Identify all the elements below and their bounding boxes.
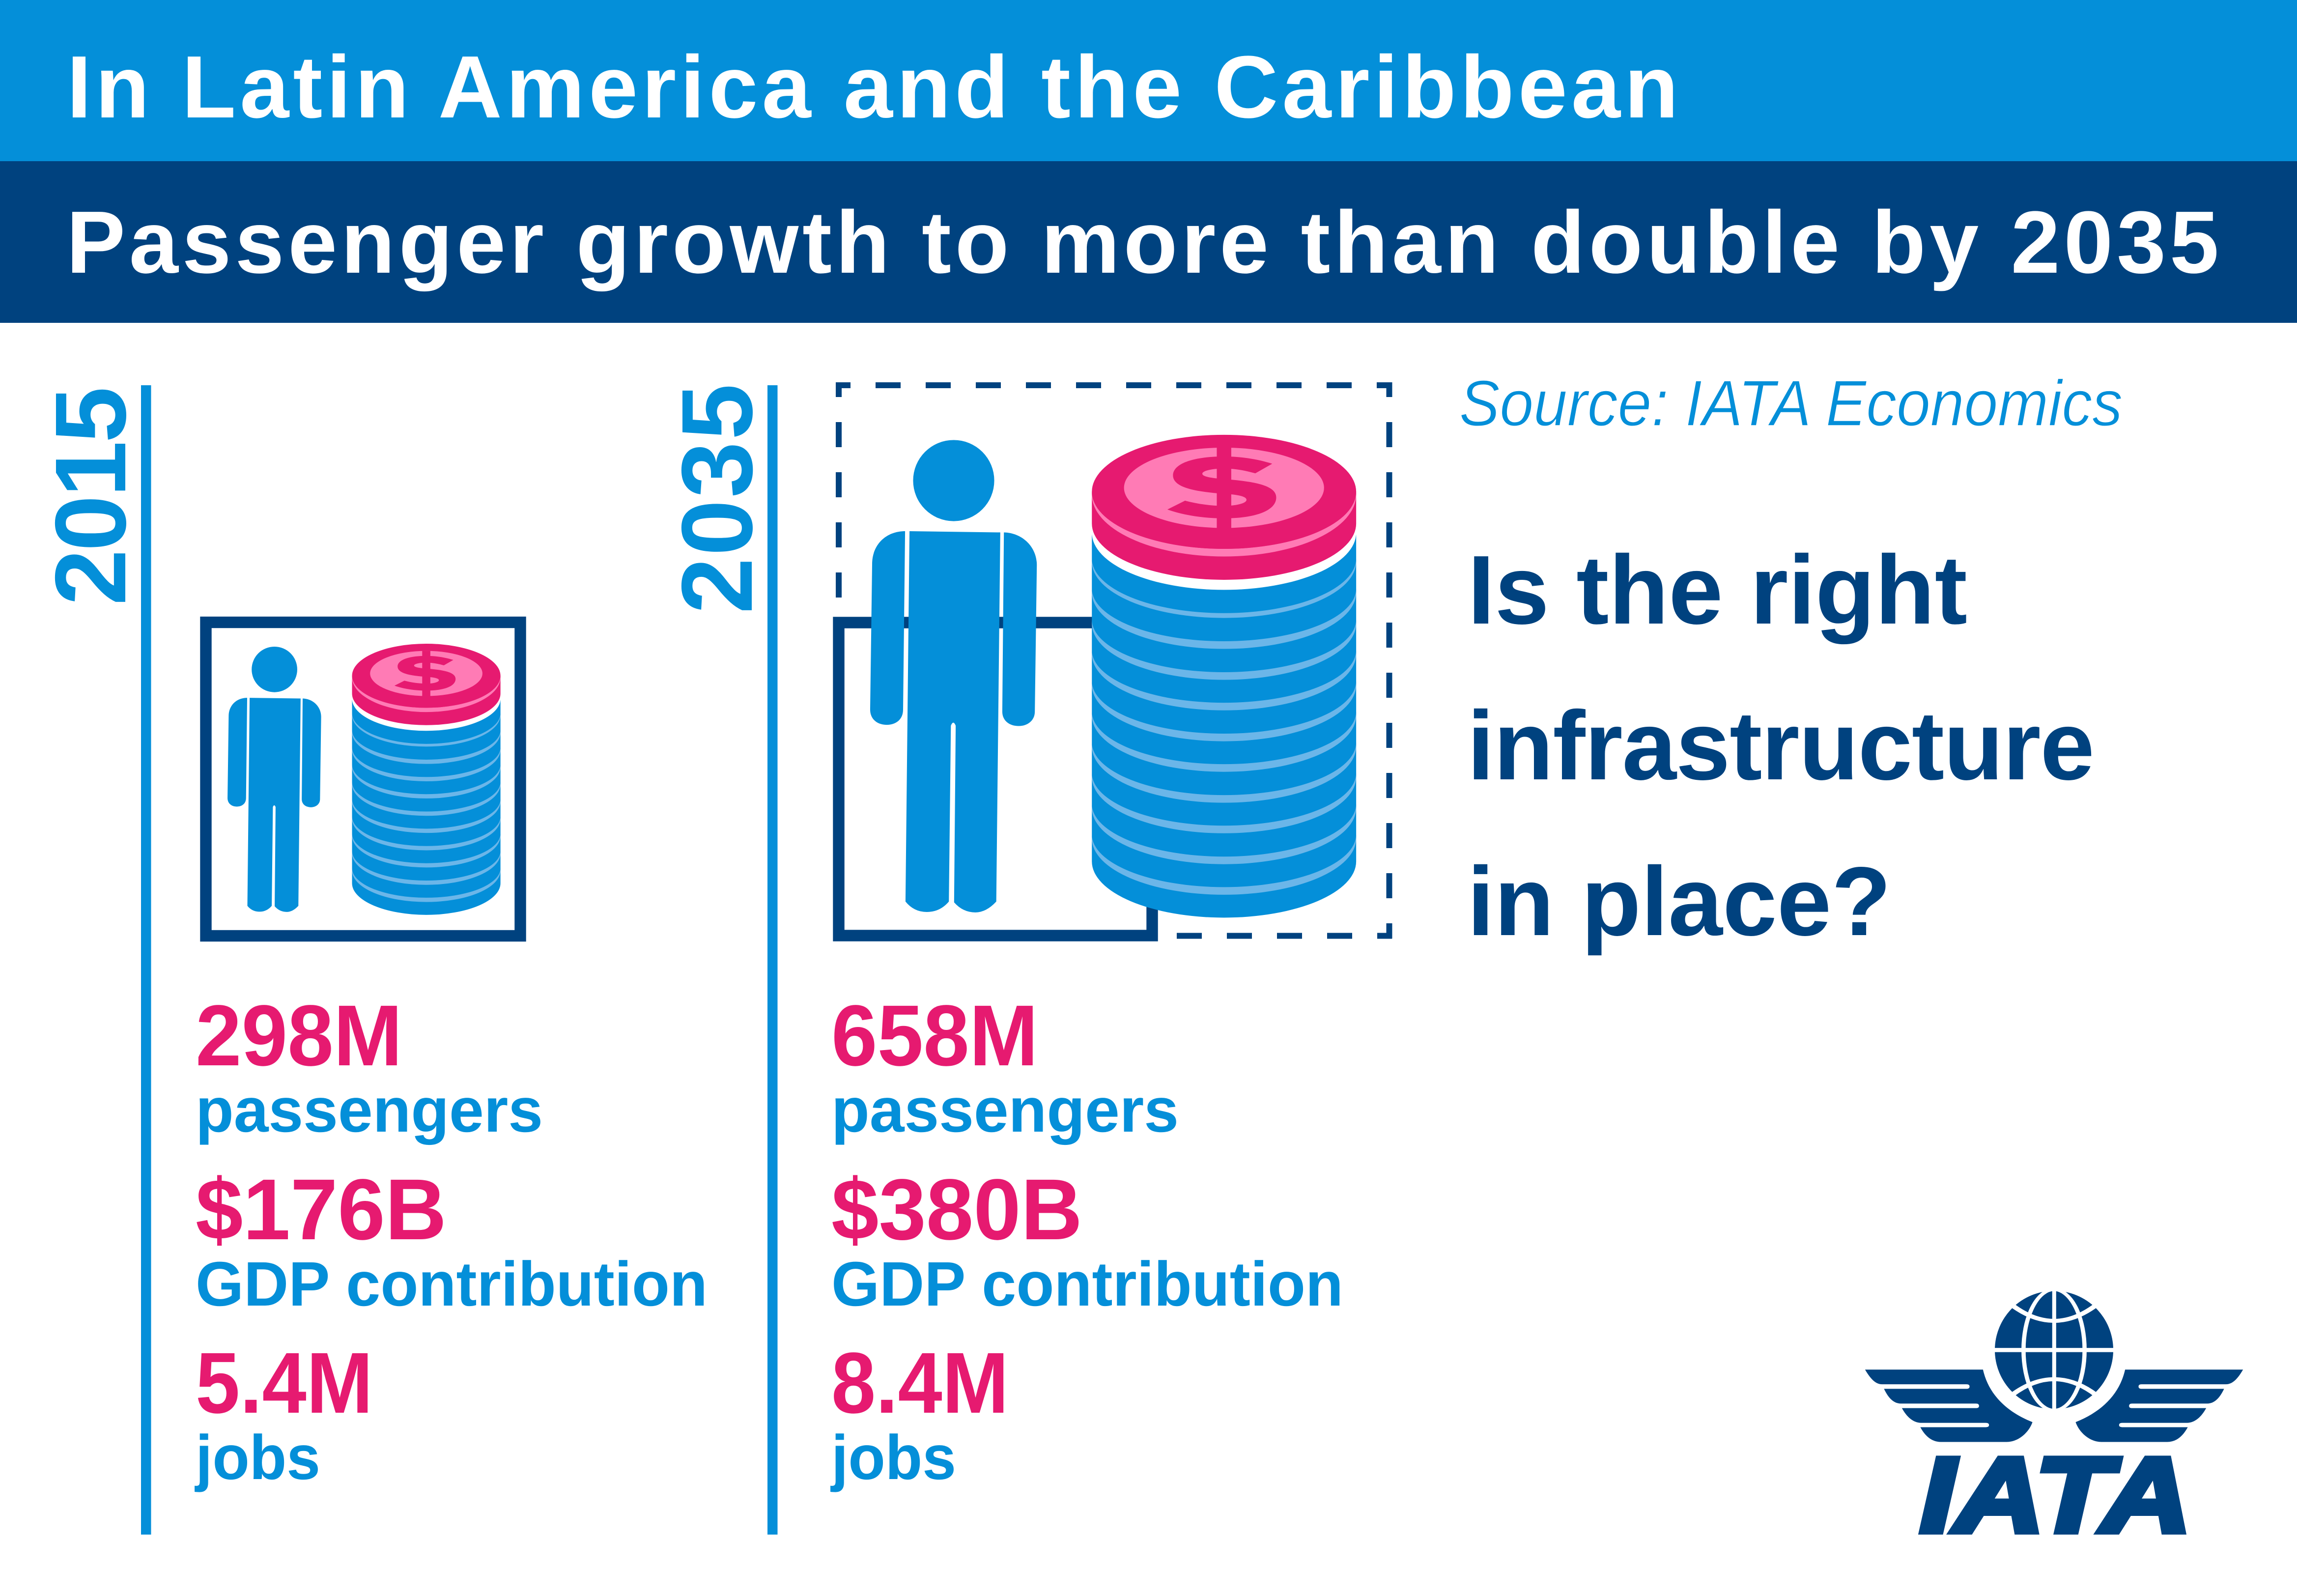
stat: 8.4M jobs [830, 1335, 1009, 1493]
stat: $176B GDP contribution: $176B [196, 1162, 447, 1258]
question text: infrastructure [1467, 691, 2095, 800]
stat: 298M passengers: passengers [196, 1075, 543, 1145]
logo: IATA [1865, 1289, 2243, 1554]
panel: 2035 [661, 382, 1392, 1535]
stat: 298M passengers [196, 988, 543, 1145]
stat: 298M passengers: 298M [196, 988, 402, 1084]
stat: 5.4M jobs: 5.4M [196, 1335, 373, 1431]
year label 2035: 2035 [661, 384, 773, 614]
stat: 658M passengers: 658M [831, 988, 1038, 1084]
question text [1467, 536, 2095, 956]
stat: 8.4M jobs: jobs [830, 1423, 956, 1493]
stat: $380B GDP contribution: GDP contribution [831, 1249, 1343, 1319]
heading: In Latin America and the Caribbean: In Latin America and the Caribbean [67, 38, 1678, 137]
icon: coin stack 2035 [1092, 435, 1356, 917]
icon: 2015 box with person and coin stack [206, 622, 520, 936]
source note: Source: IATA Economics [1459, 367, 2123, 439]
stat: $380B GDP contribution [831, 1162, 1343, 1319]
panel: 2015 [34, 385, 708, 1535]
vertical rule 2015 [141, 385, 151, 1535]
stat: $176B GDP contribution [196, 1162, 708, 1319]
stat: 5.4M jobs [195, 1335, 373, 1493]
year label 2015: 2015 [34, 387, 147, 605]
question text: in place? [1467, 847, 1891, 956]
heading: Passenger growth to more than double by 2035: Passenger growth to more than double by 2035 [66, 193, 2219, 292]
question text: Is the right [1468, 536, 1967, 645]
icon: person 2015 [227, 647, 321, 912]
header band: region [0, 0, 2297, 161]
icon: coin stack 2015 [352, 644, 501, 915]
stat: $380B GDP contribution: $380B [831, 1162, 1082, 1258]
logo wordmark: IATA [1920, 1435, 2191, 1554]
stat: 5.4M jobs: jobs [195, 1423, 320, 1493]
icon: 2035 dashed box with person and coin stack [836, 382, 1392, 939]
stat: 8.4M jobs: 8.4M [831, 1335, 1009, 1431]
stat: $176B GDP contribution: GDP contribution [196, 1249, 708, 1319]
vertical rule 2035 [767, 385, 777, 1535]
stat: 658M passengers [831, 988, 1179, 1145]
header band: headline [0, 161, 2297, 323]
logo globe and wings [1865, 1289, 2243, 1442]
icon: person 2035 [870, 440, 1037, 912]
stat: 658M passengers: passengers [831, 1075, 1179, 1145]
